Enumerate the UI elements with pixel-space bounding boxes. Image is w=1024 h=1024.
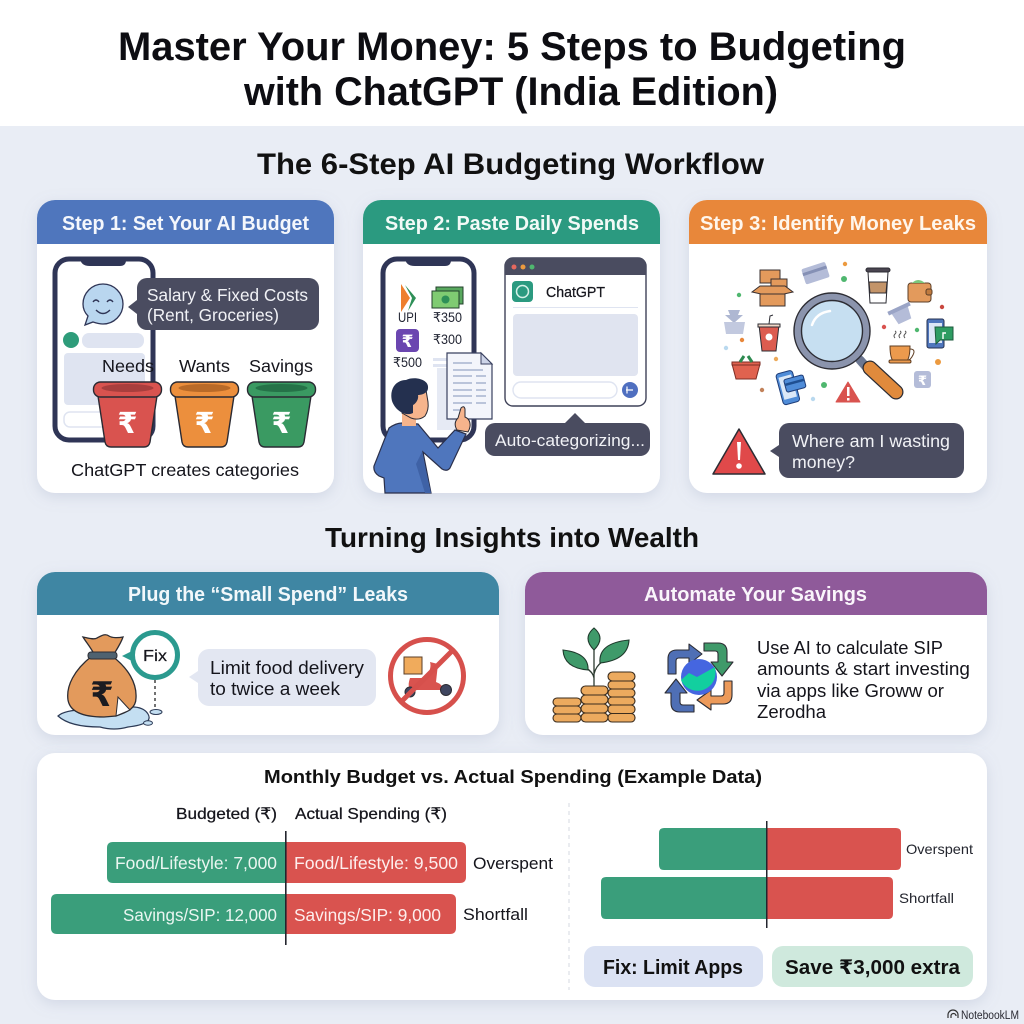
step 2 header: Step 2: Paste Daily Spends: [385, 212, 639, 235]
panel: step 2: [363, 200, 660, 493]
chart axis labels: Actual Spending (₹): [295, 806, 447, 823]
bucket labels: Needs: [102, 356, 154, 376]
pill: save 3000 extra: [772, 946, 973, 987]
bar chart: labelled: Food/Lifestyle: 9,500: [294, 853, 458, 873]
bucket labels: Wants: [179, 356, 230, 376]
icon: phone with payments: [383, 257, 474, 440]
icon: needs bucket: [94, 382, 162, 447]
icon: phone with payments: ₹300: [433, 332, 462, 347]
callout: limit food delivery: [189, 649, 376, 706]
callout: limit food delivery: to twice a week: [210, 679, 341, 699]
pill: fix limit apps: [584, 946, 763, 987]
step 3 header: [689, 200, 987, 244]
icon: leaking money bag: [58, 635, 162, 729]
bar chart: unlabelled: [601, 821, 973, 928]
icon: warning triangle: [713, 429, 765, 474]
caption: chatgpt creates categories: ChatGPT creates categories: [71, 460, 299, 480]
bucket labels: Savings: [249, 356, 313, 376]
icon: wants bucket: ₹: [194, 408, 215, 440]
leaks header: Plug the “Small Spend” Leaks: [128, 584, 408, 606]
bar chart: unlabelled: Overspent: [906, 841, 973, 857]
title banner: [0, 0, 1024, 126]
title banner: with ChatGPT (India Edition): [243, 70, 778, 114]
icon: phone with payments: UPI: [398, 310, 417, 325]
bucket labels: [102, 356, 313, 376]
icon: phone with payments: ₹500: [393, 355, 422, 370]
icon: phone with payments: ₹: [402, 332, 413, 351]
title banner: Master Your Money: 5 Steps to Budgeting: [118, 25, 906, 69]
bar chart: unlabelled: Shortfall: [899, 890, 954, 906]
callout: auto-categorizing: Auto-categorizing...: [495, 431, 645, 450]
step 1 header: Step 1: Set Your AI Budget: [62, 212, 309, 235]
panel: step 1: [37, 200, 334, 493]
icon: savings bucket: ₹: [271, 408, 292, 440]
icon: wants bucket: [170, 382, 238, 447]
icon: chatgpt window: ChatGPT: [546, 284, 605, 301]
bar chart: labelled: Overspent: [473, 855, 553, 873]
leaks header: [37, 572, 499, 615]
panel: automate savings: [525, 572, 987, 735]
icon: savings bucket: [248, 382, 316, 447]
icon: no delivery scooter: [390, 640, 464, 712]
callout: salary and fixed costs: (Rent, Groceries): [147, 305, 279, 325]
bar chart: labelled: Savings/SIP: 9,000: [294, 905, 441, 925]
text: use AI to calculate SIP: [757, 638, 970, 722]
callout: salary and fixed costs: [128, 278, 319, 330]
pill: fix limit apps: Fix: Limit Apps: [603, 957, 743, 979]
panel: step 3: [689, 200, 987, 493]
icon: person with document: [374, 353, 492, 493]
chart title: Monthly Budget vs. Actual Spending (Example Data): [264, 766, 762, 787]
icon: phone with payments: ₹350: [433, 310, 462, 325]
icon: needs bucket: ₹: [117, 408, 138, 440]
icon: magnifying glass: [794, 293, 896, 392]
text: use AI to calculate SIP: Zerodha: [757, 702, 827, 722]
chart axis labels: [176, 806, 447, 823]
text: use AI to calculate SIP: via apps like Groww or: [757, 681, 944, 701]
panel: budget vs actual chart: [37, 753, 987, 1000]
icon: spending items cluster: [724, 262, 953, 405]
text: use AI to calculate SIP: Use AI to calculate SIP: [757, 638, 943, 658]
pill: save 3000 extra: Save ₹3,000 extra: [785, 957, 961, 979]
heading: workflow: The 6-Step AI Budgeting Workflow: [257, 148, 765, 181]
icon: fix badge: [122, 632, 178, 710]
text: use AI to calculate SIP: amounts & start investing: [757, 659, 970, 679]
bar chart: labelled: Shortfall: [463, 906, 528, 924]
savings header: Automate Your Savings: [644, 584, 867, 606]
icon: spending items cluster: ₹: [918, 373, 927, 388]
savings header: [525, 572, 987, 615]
icon: fix badge: Fix: [143, 648, 167, 665]
callout: salary and fixed costs: Salary & Fixed Costs: [147, 285, 308, 305]
step 2 header: [363, 200, 660, 244]
icon: leaking money bag: ₹: [90, 676, 114, 714]
bar chart: labelled: Savings/SIP: 12,000: [123, 905, 277, 925]
icon: plant and coins: [553, 628, 635, 722]
icon: chatgpt window: [505, 258, 646, 406]
bar chart: labelled: [51, 831, 553, 945]
icon: phone with chat: [55, 257, 153, 440]
callout: limit food delivery: Limit food delivery: [210, 658, 364, 678]
callout: auto-categorizing: [485, 413, 650, 456]
panel: plug small spend leaks: [37, 572, 499, 735]
icon: automation cycle: [665, 643, 733, 712]
callout: where am I wasting money: Where am I wasting: [792, 431, 950, 451]
callout: where am I wasting money: [770, 423, 964, 478]
step 3 header: Step 3: Identify Money Leaks: [700, 212, 976, 235]
step 1 header: [37, 200, 334, 244]
chart axis labels: Budgeted (₹): [176, 806, 277, 823]
callout: where am I wasting money: money?: [792, 452, 855, 472]
heading: insights: Turning Insights into Wealth: [325, 522, 699, 553]
bar chart: labelled: Food/Lifestyle: 7,000: [115, 853, 277, 873]
